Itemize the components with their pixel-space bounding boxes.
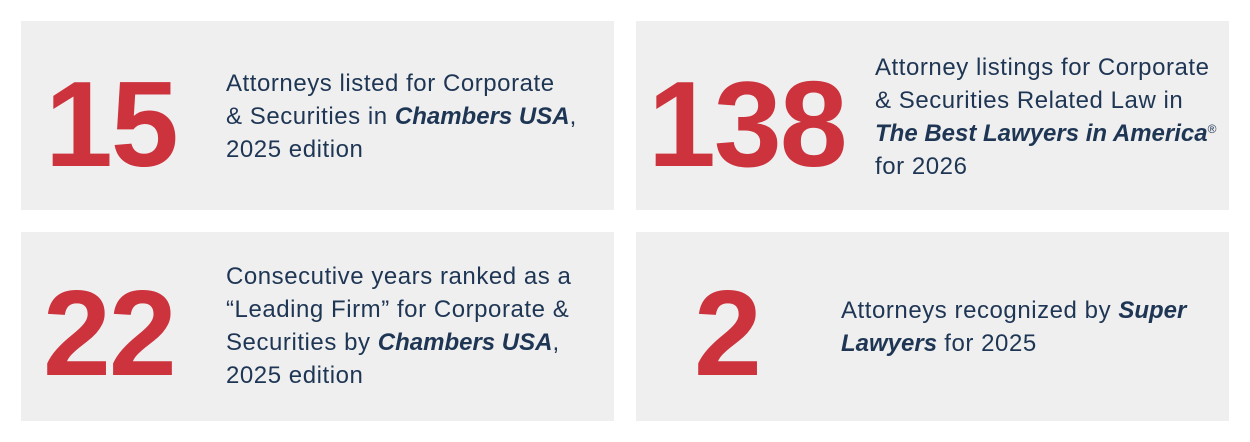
text: super lawyers [841, 297, 1188, 357]
text: best lawyers: The Best Lawyers in America® [875, 120, 1217, 147]
text: best lawyers: & Securities Related Law in [875, 87, 1183, 114]
text: best lawyers [875, 54, 1217, 180]
panel: best lawyers [636, 21, 1229, 210]
number 15: 15 [45, 56, 177, 192]
panel: leading firm [21, 232, 614, 421]
text: leading firm: Securities by Chambers USA, [226, 329, 560, 356]
text: leading firm: “Leading Firm” for Corporate & [226, 296, 569, 323]
number 2: 2 [694, 265, 760, 401]
text: best lawyers: Attorney listings for Corporate [875, 54, 1210, 81]
text: leading firm: Consecutive years ranked as a [226, 263, 571, 290]
text: chambers attorneys: Attorneys listed for Corporate [226, 70, 555, 97]
text: chambers attorneys [226, 70, 577, 163]
text: chambers attorneys: 2025 edition [226, 136, 363, 163]
number 22: 22 [43, 265, 175, 401]
panel: super lawyers [636, 232, 1229, 421]
text: leading firm [226, 263, 571, 389]
text: super lawyers: Lawyers for 2025 [841, 330, 1037, 357]
text: best lawyers: for 2026 [875, 153, 967, 180]
panel: chambers attorneys [21, 21, 614, 210]
text: super lawyers: Attorneys recognized by Super [841, 297, 1186, 324]
number 138: 138 [648, 56, 846, 192]
text: chambers attorneys: & Securities in Chambers USA, [226, 103, 577, 130]
text: leading firm: 2025 edition [226, 362, 363, 389]
